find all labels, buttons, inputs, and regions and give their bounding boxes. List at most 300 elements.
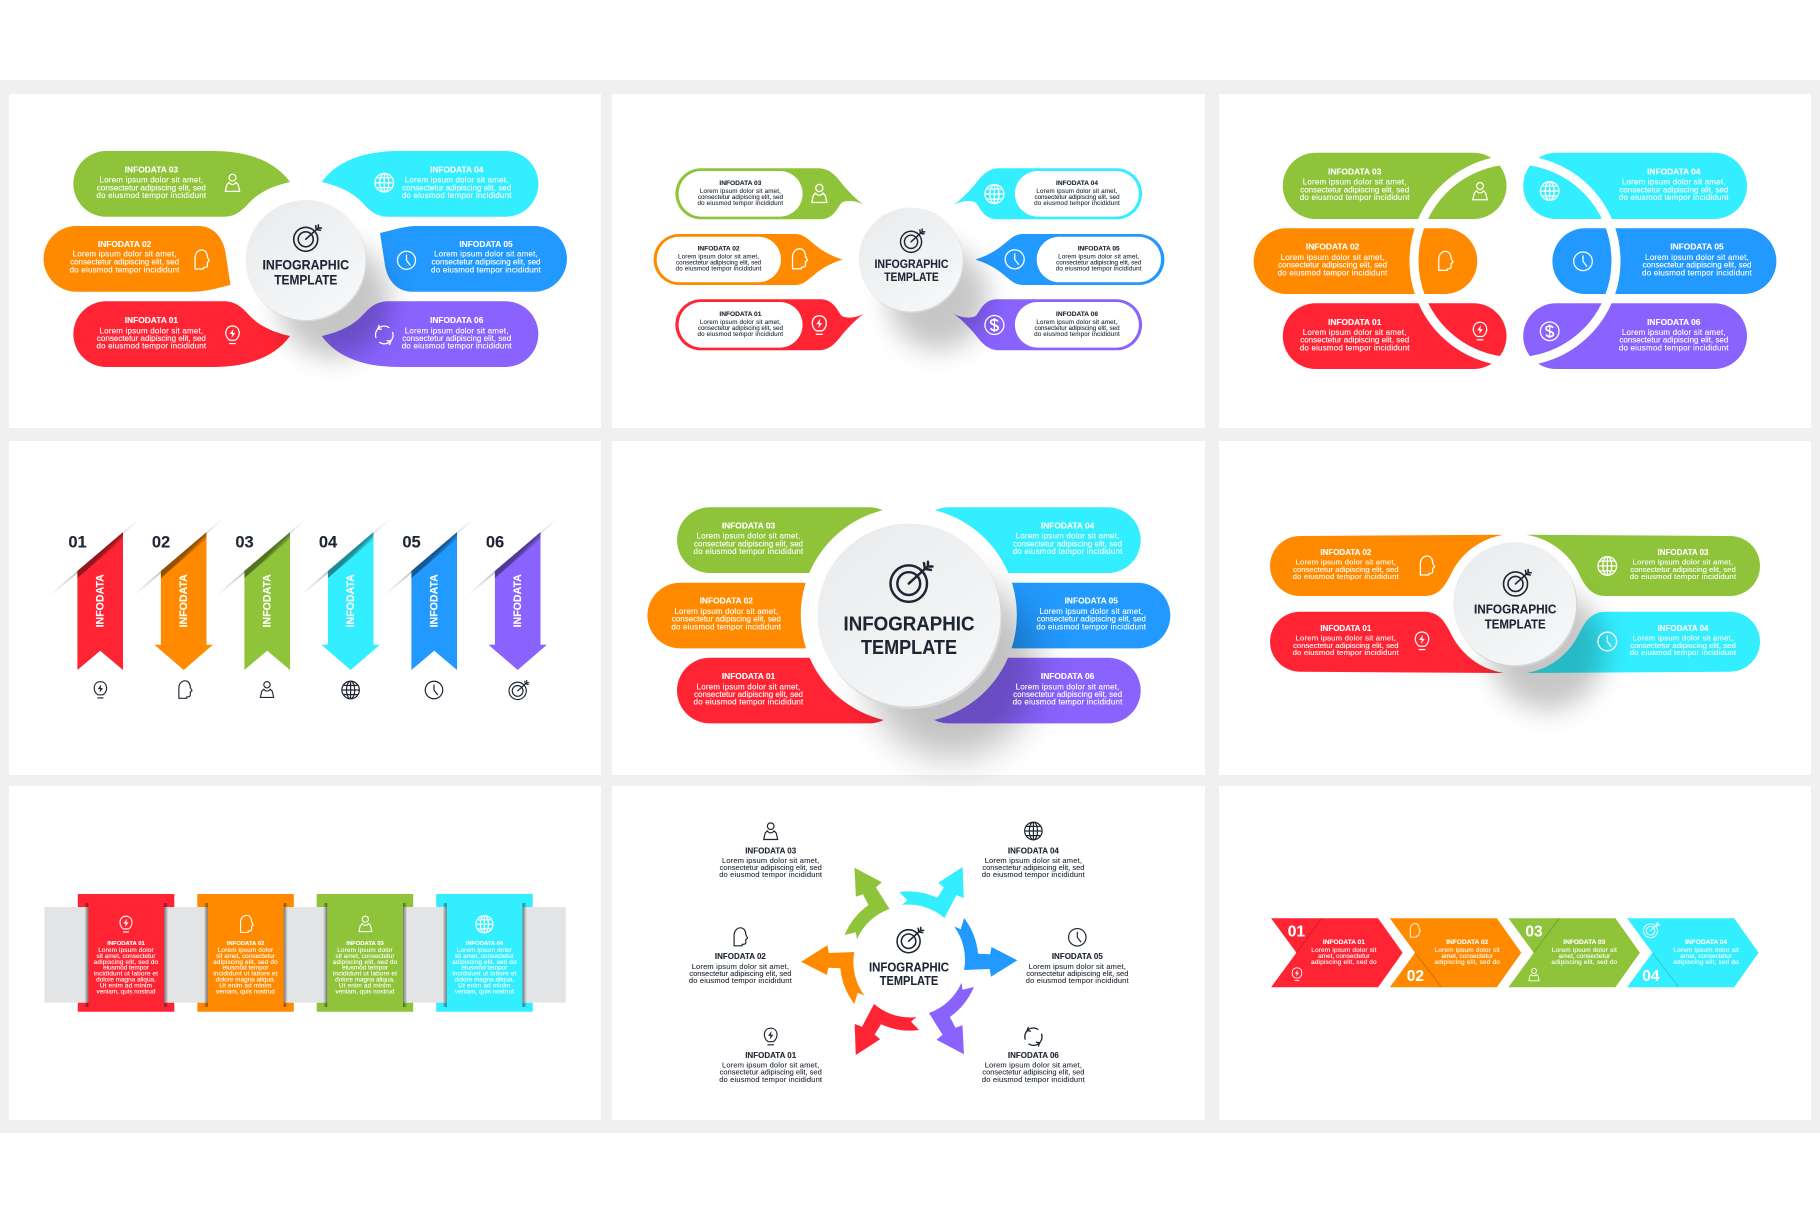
- icon: clock: [425, 681, 443, 699]
- white ring: [1414, 160, 1616, 362]
- text: infodata 05: [1056, 246, 1142, 272]
- text: infodata 01: do eiusmod tempor incididunt: [697, 331, 783, 338]
- centre title: TEMPLATE: [861, 636, 957, 659]
- icon: target: [897, 927, 924, 953]
- text: infodata 03: consectetur adipiscing elit, sed: [698, 194, 783, 201]
- centre title: INFOGRAPHIC: [262, 258, 349, 273]
- arrow 02: 02: [152, 533, 170, 551]
- text: infodata 05: consectetur adipiscing elit, sed: [1643, 261, 1751, 270]
- panel: outlined speech pills: [612, 94, 1205, 428]
- pill: infodata 06: [1523, 303, 1747, 369]
- text: infodata 06: [402, 315, 512, 351]
- text: infodata 03: do eiusmod tempor incididunt: [697, 200, 783, 207]
- text: infodata 02: Lorem ipsum dolor sit amet,: [1295, 558, 1396, 566]
- card 02: sit amet, consectetur: [216, 953, 276, 960]
- icon: target: [509, 681, 529, 700]
- panel: ribbons and arrows: [9, 441, 601, 775]
- chevron 01: Lorem ipsum dolor sit: [1311, 947, 1377, 954]
- text: infodata 03: Lorem ipsum dolor sit amet,: [697, 532, 800, 541]
- ribbon 01: [51, 519, 139, 670]
- text: infodata 02: do eiusmod tempor incididunt: [1293, 572, 1400, 581]
- text: infodata 06: consectetur adipiscing elit, sed: [402, 334, 511, 343]
- text: infodata 05: INFODATA 05: [1670, 242, 1724, 252]
- text: infodata 01: do eiusmod tempor incididunt: [1300, 343, 1410, 352]
- panel: curved arrows: [612, 786, 1205, 1120]
- text: infodata 02: do eiusmod tempor incididunt: [671, 622, 782, 631]
- text: infodata 04: INFODATA 04: [1056, 180, 1098, 187]
- arrow: green: [844, 868, 890, 939]
- text: infodata 03: [96, 164, 207, 200]
- item: infodata 01: [719, 1028, 823, 1084]
- text: infodata 05: Lorem ipsum dolor sit amet,: [1058, 254, 1139, 260]
- card 02: Lorem ipsum dolor: [218, 947, 274, 954]
- text: infodata 02: [676, 246, 762, 272]
- text: infodata 03: do eiusmod tempor incididunt: [694, 547, 804, 556]
- card 03: eiusmod tempor: [342, 965, 389, 972]
- icon: bulb: [94, 682, 107, 698]
- chevron 04: Lorem ipsum dolor sit: [1673, 947, 1739, 954]
- text: infodata 01: [1293, 624, 1400, 657]
- text: infodata 02: [70, 239, 180, 274]
- pill: infodata 06: [954, 299, 1142, 350]
- item: infodata 02: do eiusmod tempor incididunt: [689, 976, 793, 985]
- chevron 03: amet, consectetur: [1558, 953, 1611, 960]
- icon: globe: [985, 184, 1004, 204]
- text: infodata 04: do eiusmod tempor incididunt: [1619, 193, 1729, 202]
- item: infodata 05: INFODATA 05: [1052, 952, 1103, 961]
- text: infodata 02: do eiusmod tempor incididunt: [676, 266, 762, 272]
- text: infodata 05: INFODATA 05: [1065, 596, 1118, 606]
- icon: globe: [342, 681, 359, 699]
- text: infodata 02: consectetur adipiscing elit, sed: [676, 260, 762, 266]
- text: infodata 04: consectetur adipiscing elit, sed: [402, 183, 511, 192]
- ribbon 03: [218, 519, 306, 670]
- chevron 04: amet, consectetur: [1680, 953, 1733, 960]
- text: infodata 06: Lorem ipsum dolor sit amet,: [1016, 682, 1120, 691]
- icon: person: [1473, 183, 1487, 200]
- item: infodata 02: INFODATA 02: [715, 952, 766, 961]
- card 04: veniam, quis nostrud: [455, 988, 514, 995]
- chevron 02: adipiscing elit, sed do: [1434, 959, 1500, 966]
- centre title: INFOGRAPHIC: [844, 613, 975, 636]
- pill: infodata 04: [954, 168, 1142, 219]
- card 02: incididunt ut labore et: [213, 971, 278, 978]
- chevron 02: amet, consectetur: [1441, 953, 1494, 960]
- pill: infodata 04: [1523, 153, 1747, 219]
- card 02: dolore magna aliqua.: [216, 977, 276, 984]
- text: infodata 04: Lorem ipsum dolor sit amet,: [1622, 178, 1726, 187]
- chevron 04: INFODATA 04: [1685, 939, 1727, 946]
- pill: infodata 05: [940, 583, 1170, 648]
- text: infodata 01: Lorem ipsum dolor sit amet,: [1295, 634, 1396, 642]
- centre title: INFOGRAPHIC: [869, 960, 949, 974]
- text: infodata 01: Lorem ipsum dolor sit amet,: [1303, 328, 1407, 337]
- text: infodata 03: [697, 180, 783, 207]
- text: infodata 02: consectetur adipiscing elit, sed: [1293, 565, 1399, 574]
- arrow 04: [301, 519, 390, 670]
- card 02: adipiscing elit, sed do: [213, 959, 278, 966]
- petal: infodata 01: [73, 301, 290, 367]
- text: infodata 04: consectetur adipiscing elit, sed: [1034, 194, 1120, 201]
- card 04: Lorem ipsum dolor: [457, 947, 513, 954]
- chevron 04: adipiscing elit, sed do: [1673, 959, 1739, 966]
- text: infodata 06: Lorem ipsum dolor sit amet,: [1036, 319, 1118, 326]
- arrow 02: INFODATA: [178, 574, 190, 627]
- text: infodata 04: consectetur adipiscing elit, sed: [1619, 185, 1728, 194]
- circle shadow: [888, 246, 988, 350]
- text: infodata 02: consectetur adipiscing elit, sed: [672, 615, 781, 624]
- card 02: eiusmod tempor: [223, 965, 269, 972]
- arrow: orange: [796, 931, 881, 1006]
- icon: person: [260, 682, 274, 697]
- centre title: [1474, 602, 1557, 631]
- card 03: veniam, quis nostrud: [336, 988, 395, 995]
- text: infodata 06: [1034, 311, 1120, 338]
- item: infodata 06: INFODATA 06: [1008, 1051, 1059, 1060]
- item: infodata 06: do eiusmod tempor incididunt: [982, 1075, 1086, 1084]
- item: infodata 02: Lorem ipsum dolor sit amet,: [692, 962, 789, 971]
- card 01: sit amet, consectetur: [97, 953, 156, 960]
- text: infodata 05: consectetur adipiscing elit, sed: [1037, 615, 1146, 624]
- text: infodata 06: do eiusmod tempor incididunt: [402, 342, 512, 351]
- circle shadow: [866, 578, 1038, 758]
- icon: head: [179, 681, 192, 698]
- petal: infodata 06: [322, 301, 538, 367]
- icon: bulb: [1473, 322, 1487, 340]
- text: infodata 04: Lorem ipsum dolor sit amet,: [405, 176, 509, 185]
- petal: infodata 04: [322, 151, 538, 217]
- text: infodata 06: [1013, 671, 1123, 707]
- card 03: dolore magna aliqua.: [335, 977, 395, 984]
- pill: infodata 02: [1254, 228, 1477, 294]
- card 04: Ut enim ad minim: [458, 983, 510, 990]
- icon: globe: [375, 173, 394, 192]
- pill: infodata 01: [675, 299, 864, 350]
- panel: pointed petals around circle: [9, 94, 601, 428]
- chevron 03: 03: [1525, 923, 1543, 940]
- card 02: [197, 894, 294, 1012]
- text: infodata 02: do eiusmod tempor incididunt: [70, 265, 180, 274]
- arrow 06: 06: [486, 533, 504, 551]
- text: infodata 06: consectetur adipiscing elit, sed: [1034, 325, 1120, 332]
- pill: infodata 01: [1270, 612, 1504, 673]
- text: infodata 04: [402, 164, 512, 200]
- text: infodata 01: consectetur adipiscing elit, sed: [97, 334, 206, 343]
- card 03: incididunt ut labore et: [333, 971, 397, 978]
- arrow 04: INFODATA: [345, 574, 357, 627]
- text: infodata 06: Lorem ipsum dolor sit amet,: [405, 326, 509, 335]
- card 02: INFODATA 02: [227, 941, 265, 947]
- icon: refresh: [376, 325, 393, 345]
- panel: large centre circle: [612, 441, 1205, 775]
- text: infodata 06: consectetur adipiscing elit, sed: [1619, 336, 1728, 345]
- text: infodata 03: do eiusmod tempor incididunt: [96, 191, 207, 200]
- text: infodata 03: do eiusmod tempor incididunt: [1300, 193, 1410, 202]
- text: infodata 01: INFODATA 01: [1328, 317, 1382, 327]
- chevron 02: Lorem ipsum dolor sit: [1434, 947, 1500, 954]
- text: infodata 01: Lorem ipsum dolor sit amet,: [697, 682, 800, 691]
- text: infodata 02: INFODATA 02: [700, 596, 753, 606]
- text: infodata 04: INFODATA 04: [1658, 624, 1709, 633]
- centre circle: [818, 524, 1002, 709]
- text: infodata 03: Lorem ipsum dolor sit amet,: [1633, 558, 1733, 566]
- text: infodata 01: Lorem ipsum dolor sit amet,: [700, 319, 781, 326]
- text: infodata 01: consectetur adipiscing elit, sed: [1293, 641, 1399, 650]
- card 01: INFODATA 01: [107, 941, 145, 947]
- icon: person: [225, 174, 240, 191]
- text: infodata 01: [694, 671, 804, 707]
- pill: infodata 04: [916, 507, 1141, 573]
- panel: chevron process: [1219, 786, 1811, 1120]
- icon: head: [195, 250, 209, 269]
- petal: infodata 05: [380, 226, 567, 292]
- text: infodata 03: consectetur adipiscing elit, sed: [1630, 565, 1736, 574]
- text: infodata 02: [1278, 242, 1388, 277]
- centre title: [262, 258, 349, 288]
- item: infodata 03: INFODATA 03: [745, 847, 797, 856]
- text: infodata 03: consectetur adipiscing elit, sed: [1300, 185, 1409, 194]
- card 01: [78, 894, 174, 1012]
- card 03: Ut enim ad minim: [339, 983, 391, 990]
- text: infodata 02: do eiusmod tempor incididunt: [1278, 268, 1388, 277]
- text: infodata 03: Lorem ipsum dolor sit amet,: [1303, 178, 1407, 187]
- panel: pills split by ring: [1219, 94, 1811, 428]
- text: infodata 05: do eiusmod tempor incididunt: [1056, 266, 1142, 272]
- chevron 03: Lorem ipsum dolor sit: [1552, 947, 1617, 954]
- text: infodata 01: Lorem ipsum dolor sit amet,: [99, 326, 203, 335]
- item: infodata 04: Lorem ipsum dolor sit amet,: [985, 856, 1082, 865]
- text: infodata 05: [1642, 242, 1753, 277]
- item: infodata 02: [689, 928, 793, 985]
- text: infodata 06: INFODATA 06: [1041, 671, 1095, 681]
- chevron 04: 04: [1642, 968, 1660, 985]
- petal: infodata 03: [73, 151, 290, 217]
- text: infodata 05: Lorem ipsum dolor sit amet,: [1039, 607, 1143, 616]
- petal: infodata 02: [44, 226, 231, 292]
- pill: infodata 02: [654, 234, 843, 285]
- card 04: [436, 894, 533, 1012]
- text: infodata 03: [1630, 548, 1737, 581]
- card 02: Ut enim ad minim: [219, 983, 272, 990]
- text: infodata 04: INFODATA 04: [1647, 167, 1701, 177]
- card 04: adipiscing elit, sed do: [452, 959, 517, 966]
- text: infodata 02: [671, 596, 782, 631]
- centre title: TEMPLATE: [880, 974, 938, 988]
- card 01: adipiscing elit, sed do: [94, 959, 159, 966]
- item: infodata 06: consectetur adipiscing elit, sed: [982, 1067, 1084, 1076]
- pill: infodata 03: [1526, 535, 1760, 596]
- icon: target: [900, 229, 925, 252]
- text: infodata 04: INFODATA 04: [1041, 521, 1095, 531]
- text: infodata 03: consectetur adipiscing elit, sed: [97, 183, 206, 192]
- centre title: INFOGRAPHIC: [874, 258, 949, 271]
- item: infodata 05: consectetur adipiscing elit, sed: [1026, 969, 1128, 978]
- item: infodata 05: [1026, 929, 1130, 985]
- item: infodata 01: do eiusmod tempor incididunt: [719, 1075, 823, 1084]
- text: infodata 04: consectetur adipiscing elit, sed: [1630, 641, 1736, 650]
- chevron 01: adipiscing elit, sed do: [1311, 959, 1377, 966]
- icon: clock: [1005, 250, 1024, 269]
- text: infodata 05: consectetur adipiscing elit, sed: [432, 258, 540, 267]
- text: infodata 05: Lorem ipsum dolor sit amet,: [434, 250, 538, 259]
- text: infodata 03: Lorem ipsum dolor sit amet,: [99, 176, 203, 185]
- chevron 03: INFODATA 03: [1563, 939, 1606, 946]
- arrow 02: [134, 519, 223, 670]
- chevron 04: [1627, 918, 1759, 987]
- card 01: incididunt ut labore et: [94, 971, 158, 978]
- chevron 01: 01: [1288, 923, 1305, 940]
- card 01: Ut enim ad minim: [100, 983, 152, 990]
- card 03: sit amet, consectetur: [336, 953, 395, 960]
- text: infodata 01: consectetur adipiscing elit, sed: [694, 690, 803, 699]
- item: infodata 06: [982, 1027, 1086, 1084]
- text: infodata 03: INFODATA 03: [722, 521, 776, 531]
- text: infodata 05: do eiusmod tempor incididunt: [431, 265, 542, 274]
- text: infodata 03: [1300, 167, 1410, 202]
- text: infodata 06: do eiusmod tempor incididunt: [1619, 343, 1729, 352]
- centre title: [844, 613, 975, 659]
- text: infodata 03: consectetur adipiscing elit, sed: [694, 539, 803, 548]
- chevron 03: adipiscing elit, sed do: [1551, 959, 1617, 966]
- ribbon 03: 03: [235, 533, 254, 551]
- text: infodata 01: [697, 311, 783, 338]
- item: infodata 05: do eiusmod tempor incididunt: [1026, 976, 1130, 985]
- pill: infodata 03: [677, 507, 902, 573]
- pill: infodata 02: [1270, 535, 1504, 596]
- text: infodata 02: consectetur adipiscing elit, sed: [1278, 261, 1387, 270]
- pill: infodata 03: [1283, 153, 1506, 219]
- text: infodata 01: INFODATA 01: [719, 311, 762, 318]
- chevron 01: INFODATA 01: [1323, 939, 1365, 946]
- text: infodata 05: [1036, 596, 1147, 631]
- text: infodata 05: do eiusmod tempor incididunt: [1642, 268, 1753, 277]
- ribbon 05: [385, 519, 473, 670]
- icon: clock: [397, 251, 416, 269]
- arrow: cyan: [896, 858, 980, 933]
- icon: dollar: [985, 316, 1004, 334]
- text: infodata 01: INFODATA 01: [722, 671, 776, 681]
- pill: infodata 06: [916, 658, 1141, 723]
- text: infodata 06: [1619, 317, 1729, 352]
- item: infodata 04: INFODATA 04: [1008, 847, 1059, 856]
- text: infodata 04: do eiusmod tempor incididunt: [1034, 200, 1120, 207]
- text: infodata 01: consectetur adipiscing elit, sed: [698, 325, 783, 332]
- item: infodata 04: consectetur adipiscing elit, sed: [982, 863, 1084, 872]
- icon: target: [1504, 570, 1531, 596]
- icon: clock: [1574, 252, 1592, 271]
- icon: bulb: [226, 326, 239, 344]
- icon: bulb: [1415, 632, 1429, 650]
- card 03: adipiscing elit, sed do: [333, 959, 398, 966]
- item: infodata 04: [982, 822, 1086, 879]
- text: infodata 03: [694, 521, 804, 556]
- arrow 06: [468, 519, 557, 670]
- ribbon 03: INFODATA: [262, 574, 274, 627]
- centre title: [869, 960, 949, 988]
- centre circle: [859, 208, 964, 313]
- card 04: eiusmod tempor: [461, 965, 508, 972]
- text: infodata 06: INFODATA 06: [430, 315, 484, 325]
- card 01: dolore magna aliqua.: [96, 977, 156, 984]
- arrow: red: [838, 989, 923, 1064]
- grey band: [44, 907, 566, 1003]
- item: infodata 03: do eiusmod tempor incididunt: [719, 870, 823, 879]
- text: infodata 06: do eiusmod tempor incididunt: [1034, 331, 1120, 338]
- centre title: TEMPLATE: [1485, 616, 1546, 631]
- pill: infodata 05: [975, 234, 1164, 285]
- card 04: dolore magna aliqua.: [455, 977, 514, 984]
- centre circle: [1453, 542, 1578, 667]
- icon: bulb: [812, 316, 826, 334]
- centre circle: [246, 200, 367, 321]
- pill: infodata 01: [677, 658, 902, 723]
- card 03: [317, 894, 413, 1012]
- card 04: sit amet, consectetur: [455, 953, 515, 960]
- icon: person: [812, 184, 827, 202]
- icon: head: [1439, 251, 1453, 270]
- arrow: blue: [938, 916, 1022, 991]
- ribbon 01: INFODATA: [95, 574, 107, 627]
- white halo: [801, 507, 1017, 723]
- text: infodata 05: INFODATA 05: [1078, 246, 1120, 253]
- chevron 01: [1271, 918, 1403, 987]
- text: infodata 04: do eiusmod tempor incididunt: [1013, 547, 1123, 556]
- circle shadow: [1489, 590, 1605, 710]
- card 01: Lorem ipsum dolor: [98, 947, 154, 954]
- chevron 02: [1390, 918, 1521, 987]
- panel: four pills with circle: [1219, 441, 1811, 775]
- text: infodata 06: INFODATA 06: [1647, 317, 1701, 327]
- text: infodata 05: do eiusmod tempor incididunt: [1036, 622, 1147, 631]
- text: infodata 04: INFODATA 04: [430, 164, 484, 174]
- icon: target: [294, 225, 321, 251]
- text: infodata 06: Lorem ipsum dolor sit amet,: [1622, 328, 1726, 337]
- centre title: TEMPLATE: [274, 273, 337, 288]
- ribbon 01: 01: [68, 533, 87, 551]
- card 01: veniam, quis nostrud: [97, 988, 156, 995]
- text: infodata 03: INFODATA 03: [719, 180, 762, 187]
- ribbon 05: 05: [402, 533, 421, 551]
- pill: infodata 05: [1552, 228, 1776, 294]
- text: infodata 02: Lorem ipsum dolor sit amet,: [1281, 253, 1385, 262]
- text: infodata 01: [96, 315, 207, 351]
- pill: infodata 03: [675, 168, 864, 219]
- text: infodata 02: consectetur adipiscing elit, sed: [70, 258, 179, 267]
- card 01: eiusmod tempor: [103, 965, 150, 972]
- card 03: INFODATA 03: [346, 941, 384, 947]
- text: infodata 05: Lorem ipsum dolor sit amet,: [1645, 253, 1749, 262]
- text: infodata 03: INFODATA 03: [125, 164, 178, 174]
- panel: cards on grey band: [9, 786, 601, 1120]
- text: infodata 05: INFODATA 05: [459, 239, 513, 249]
- chevron 03: [1508, 918, 1640, 987]
- item: infodata 04: do eiusmod tempor incididunt: [982, 870, 1086, 879]
- arrow 06: INFODATA: [512, 574, 524, 627]
- text: infodata 02: INFODATA 02: [1320, 548, 1372, 557]
- ribbon 05: INFODATA: [428, 574, 440, 627]
- text: infodata 03: do eiusmod tempor incididunt: [1630, 572, 1737, 581]
- item: infodata 01: Lorem ipsum dolor sit amet,: [722, 1060, 819, 1069]
- card 03: Lorem ipsum dolor: [337, 947, 393, 954]
- item: infodata 01: INFODATA 01: [745, 1051, 797, 1060]
- text: infodata 03: INFODATA 03: [1658, 548, 1709, 557]
- item: infodata 03: Lorem ipsum dolor sit amet,: [722, 856, 819, 865]
- item: infodata 01: consectetur adipiscing elit, sed: [720, 1067, 822, 1076]
- item: infodata 03: consectetur adipiscing elit, sed: [720, 863, 822, 872]
- card 04: incididunt ut labore et: [452, 971, 517, 978]
- icon: clock: [1598, 632, 1617, 651]
- circle shadow: [278, 242, 390, 358]
